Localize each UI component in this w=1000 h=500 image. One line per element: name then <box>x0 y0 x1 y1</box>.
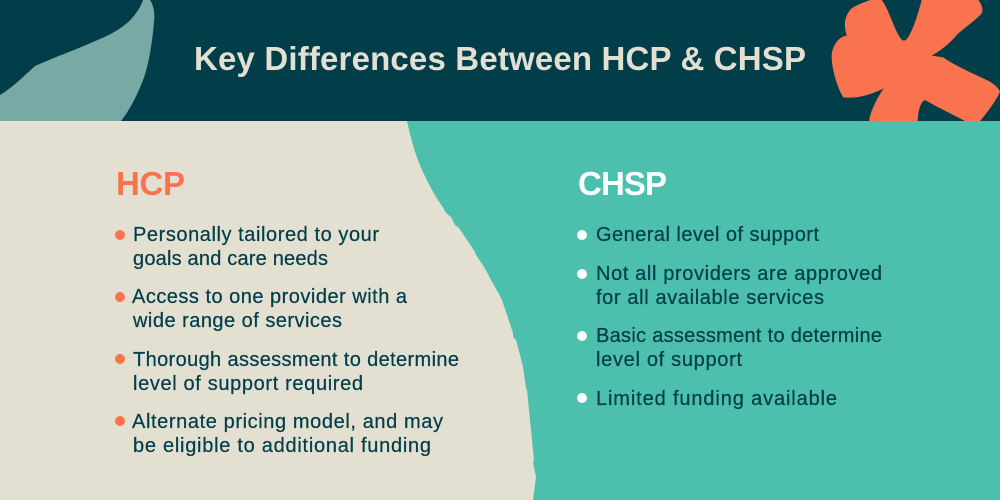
bullet: pricing model <box>115 411 443 457</box>
panel: CHSP list <box>577 165 882 410</box>
bullet: pricing model: be eligible to additional funding <box>133 435 431 457</box>
bullet: thorough assessment: Thorough assessment to determine <box>133 349 459 371</box>
panel: CHSP background brush shape <box>407 121 1000 500</box>
bullet: basic assessment <box>577 325 882 371</box>
bullet: limited funding: Limited funding available <box>596 388 837 410</box>
bullet: providers approved <box>577 263 882 309</box>
panel: HCP list <box>115 165 459 457</box>
bullet: general support: General level of support <box>596 224 819 246</box>
bullet: thorough assessment: level of support required <box>133 373 363 395</box>
bullet: pricing model: Alternate pricing model, and may <box>132 411 443 433</box>
header band <box>0 0 1000 121</box>
heading: HCP: HCP <box>116 165 185 202</box>
icon: muted teal brush stroke <box>0 0 154 121</box>
heading: CHSP: CHSP <box>578 165 667 202</box>
bullet: tailored <box>115 224 379 270</box>
title: Key Differences Between HCP & CHSP <box>194 40 806 77</box>
icon: coral brush flower <box>832 0 1000 121</box>
bullet: tailored: Personally tailored to your <box>133 224 379 246</box>
bullet: providers approved: Not all providers are approved <box>596 263 882 285</box>
bullet: one provider <box>115 286 408 332</box>
bullet: basic assessment: Basic assessment to determine <box>596 325 882 347</box>
bullet: basic assessment: level of support <box>596 349 742 371</box>
bullet: tailored: goals and care needs <box>133 248 328 270</box>
bullet: one provider: Access to one provider with a <box>132 286 408 308</box>
bullet: one provider: wide range of services <box>132 310 342 332</box>
panel: HCP background <box>0 121 1000 500</box>
bullet: providers approved: for all available services <box>596 287 824 309</box>
bullet: thorough assessment <box>115 349 459 395</box>
